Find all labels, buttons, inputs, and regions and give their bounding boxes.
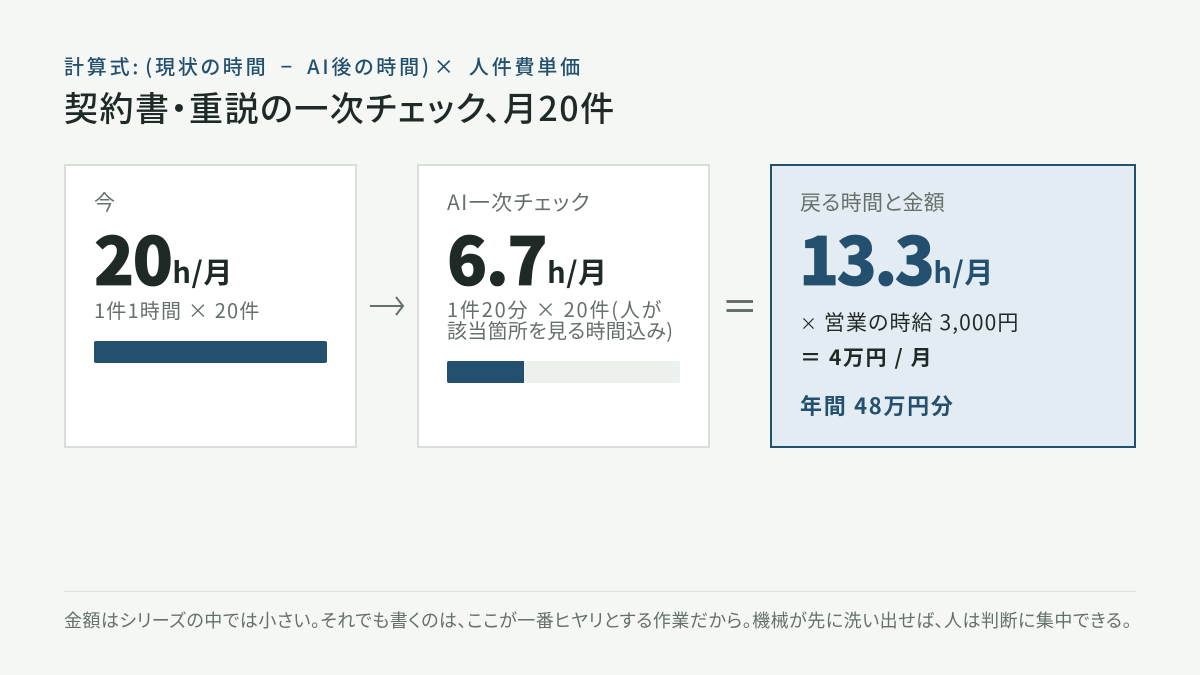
monthly amount: ＝ 4万円 / 月: [800, 342, 933, 372]
value: 6.7h per month: 6.7h/月: [447, 209, 608, 305]
footer rule: [64, 591, 1136, 592]
hourly rate: × 営業の時給 3,000円: [800, 307, 1020, 337]
value: 13.3h per month: 13.3h/月: [799, 209, 994, 305]
panel: result: [770, 164, 1136, 448]
calculation: AI check: 該当箇所を見る時間込み): [447, 315, 673, 344]
bar: AI check: [447, 361, 680, 383]
bar: current: [94, 341, 327, 363]
value: 20h per month: 20h/月: [94, 209, 233, 305]
calculation: current: 1件1時間 × 20件: [94, 295, 261, 324]
eyebrow: formula: 計算式:(現状の時間 − AI後の時間)× 人件費単価: [64, 51, 583, 80]
panel label: result: 戻る時間と金額: [800, 187, 945, 217]
footer note: 金額はシリーズの中では小さい。それでも書くのは、ここが一番ヒヤリとする作業だから。機械が先に洗い出せば、人は判断に集中できる。: [64, 607, 1132, 633]
arrow: [370, 296, 404, 316]
calculation: AI check: 1件20分 × 20件(人が: [447, 294, 663, 323]
equals sign: [726, 300, 753, 312]
panel: AI check: [417, 164, 710, 448]
panel label: AI check: AI一次チェック: [447, 187, 591, 217]
yearly amount: 年間 48万円分: [800, 389, 955, 421]
title: 契約書・重説の一次チェック、月20件: [64, 82, 616, 131]
panel: current: [64, 164, 357, 448]
calculation: AI check: [447, 294, 673, 344]
panel label: current: 今: [94, 187, 115, 217]
